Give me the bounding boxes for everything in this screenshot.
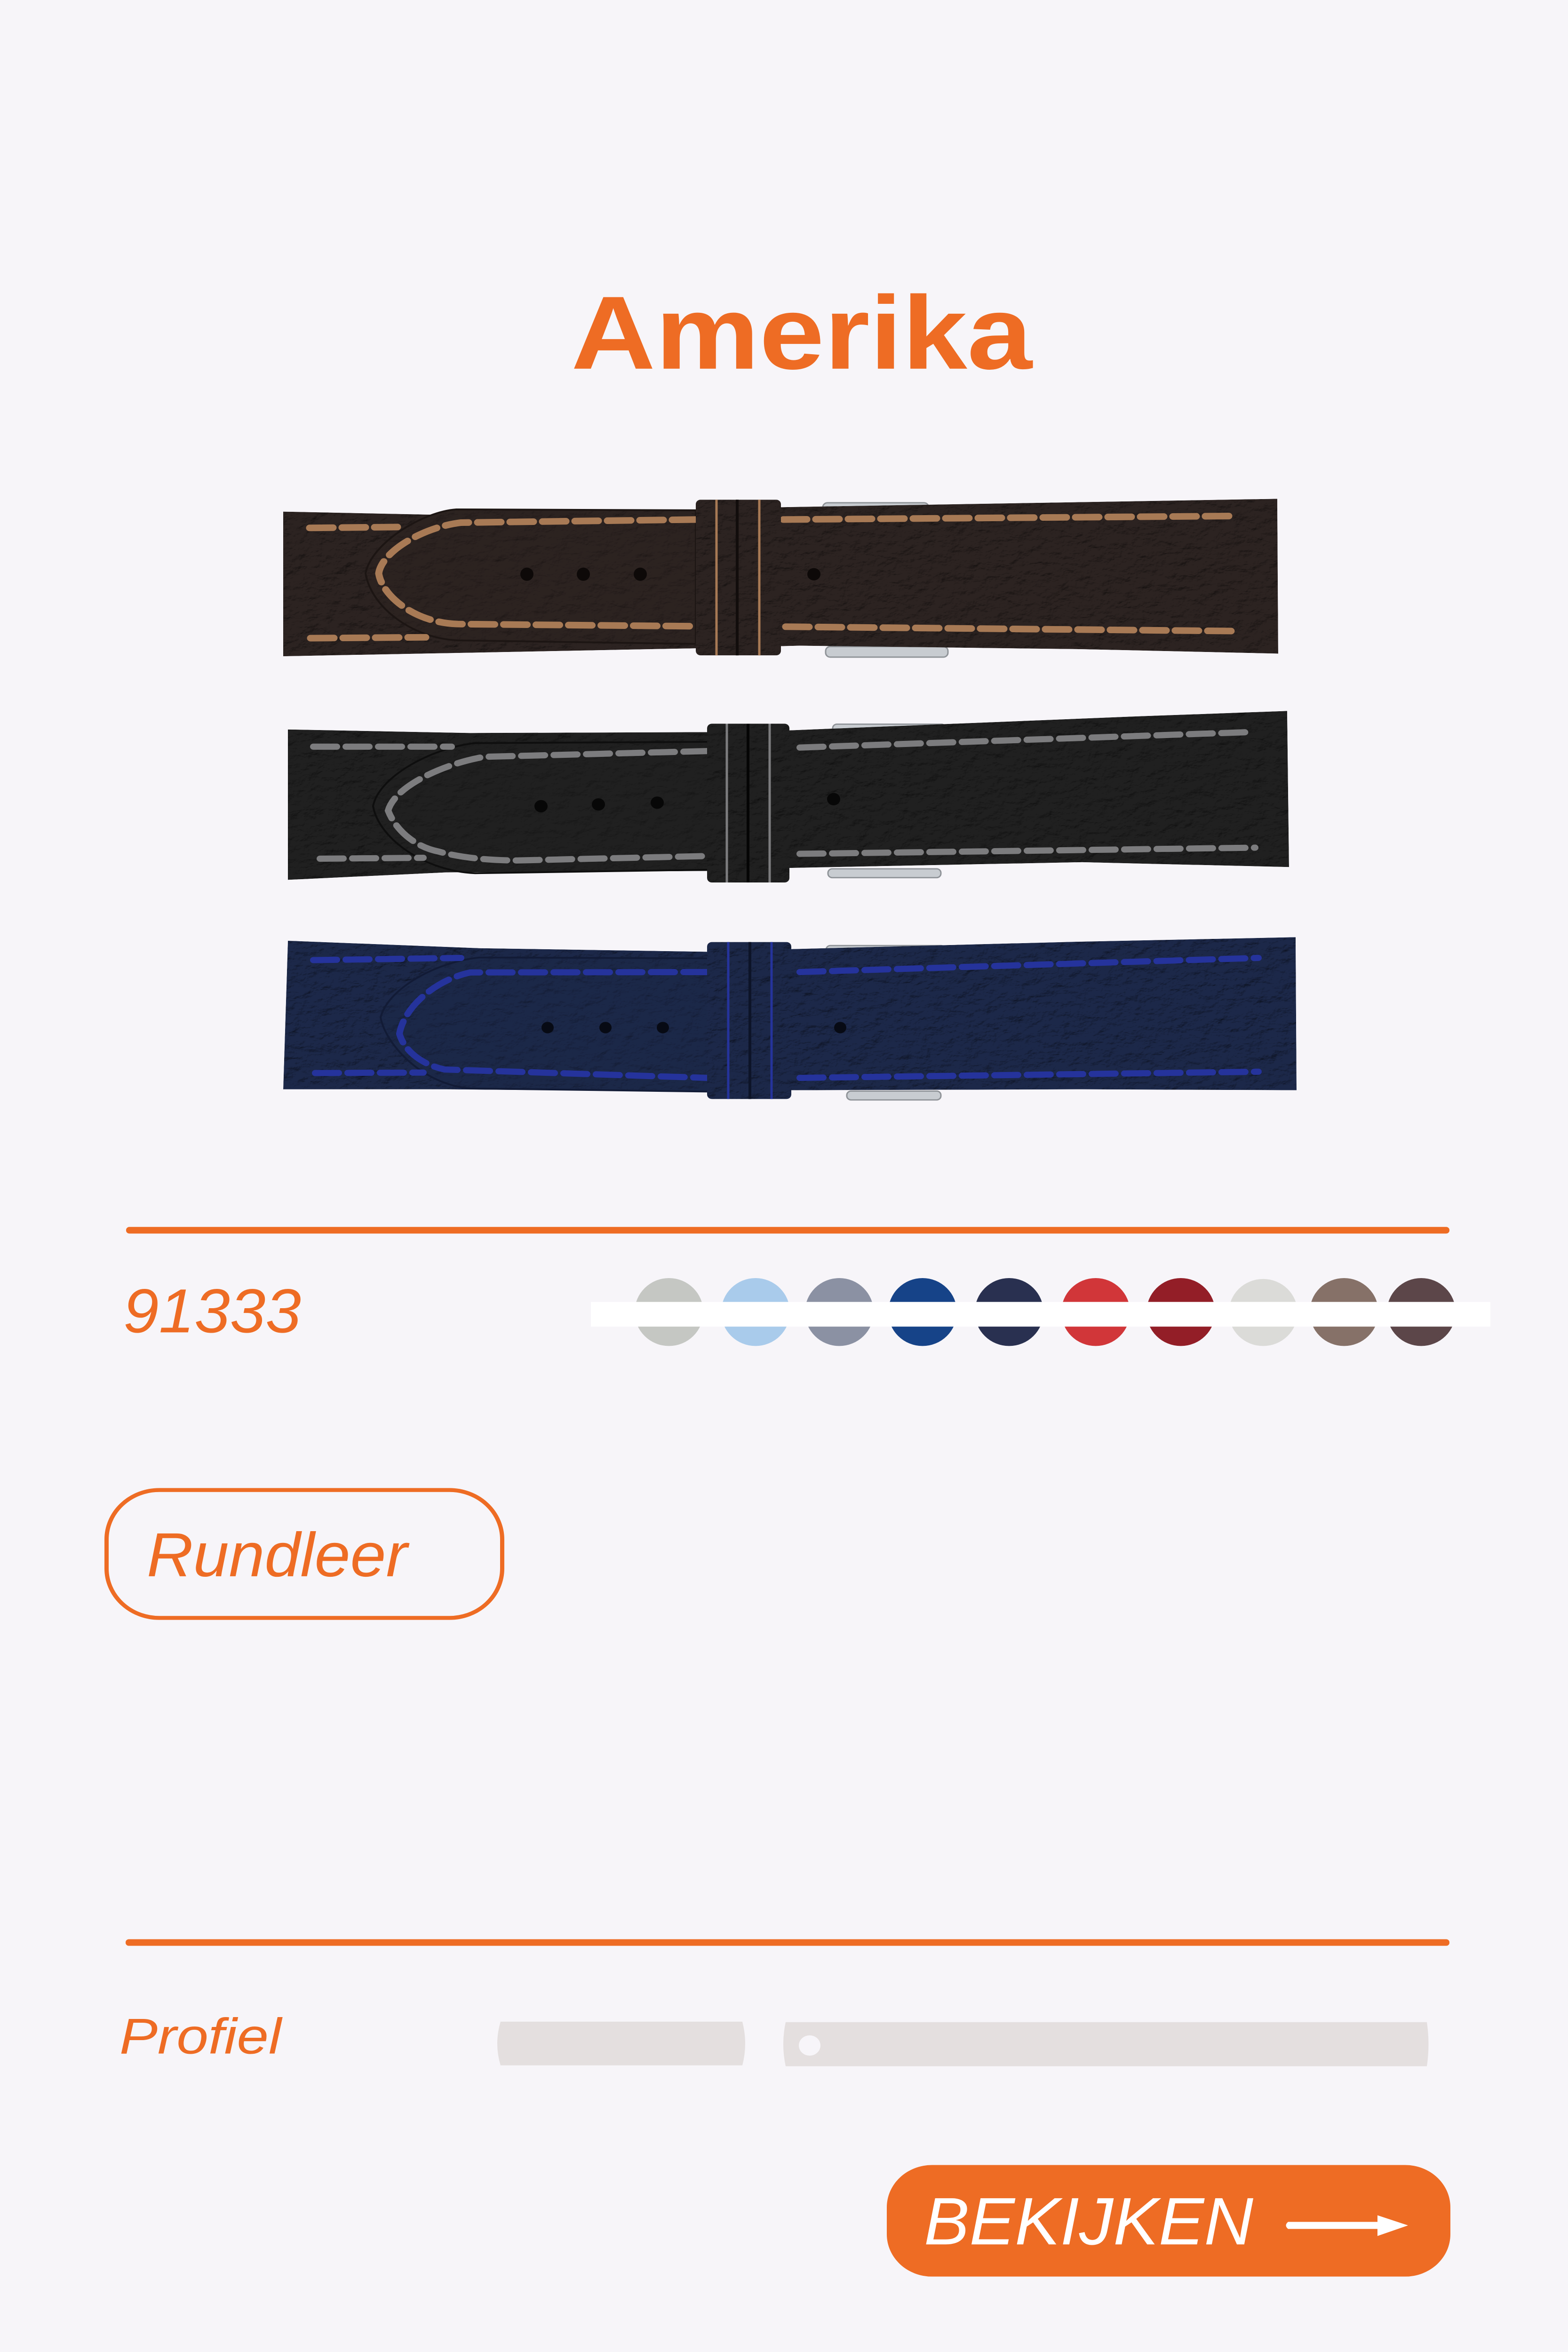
profile bar: long [783,2022,1428,2066]
strap body: brown [283,499,1278,656]
buckle: black strap [828,724,946,878]
article number: 91333 [123,1276,301,1345]
white band across swatches [591,1302,1490,1327]
strap body: navy [283,937,1297,1091]
divider: bottom rule [126,1939,1449,1946]
button label: BEKIJKEN [924,2185,1254,2259]
title: Amerika [571,275,1033,391]
stitching: brown strap [310,516,1237,638]
keeper loop: navy strap [707,942,791,1099]
strap: brown with tan stitching [283,499,1278,657]
strap: navy with blue stitching [283,937,1297,1100]
keeper loop: brown strap [696,500,781,655]
tongue: black [373,742,707,873]
keeper loop: black strap [707,724,789,882]
strap body: black [288,711,1289,880]
profile label: Profiel [119,2009,283,2064]
material tag [106,1490,502,1618]
punch holes: navy strap [541,1022,846,1033]
button [887,2165,1450,2277]
tongue: brown [366,509,696,644]
arrow [1286,2215,1408,2236]
buckle: brown strap [823,503,948,657]
material tag: Rundleer [147,1520,410,1589]
punch holes: brown strap [520,568,820,581]
profile bar: short [497,2022,745,2066]
strap: black with grey stitching [288,711,1289,882]
colour swatches [635,1278,1456,1346]
stitching: black strap [313,732,1255,860]
divider: top rule [126,1227,1449,1233]
buckle: navy strap [826,946,945,1100]
punch holes: black strap [534,793,840,812]
stitching: navy strap [313,958,1258,1078]
tongue: navy [381,957,707,1091]
